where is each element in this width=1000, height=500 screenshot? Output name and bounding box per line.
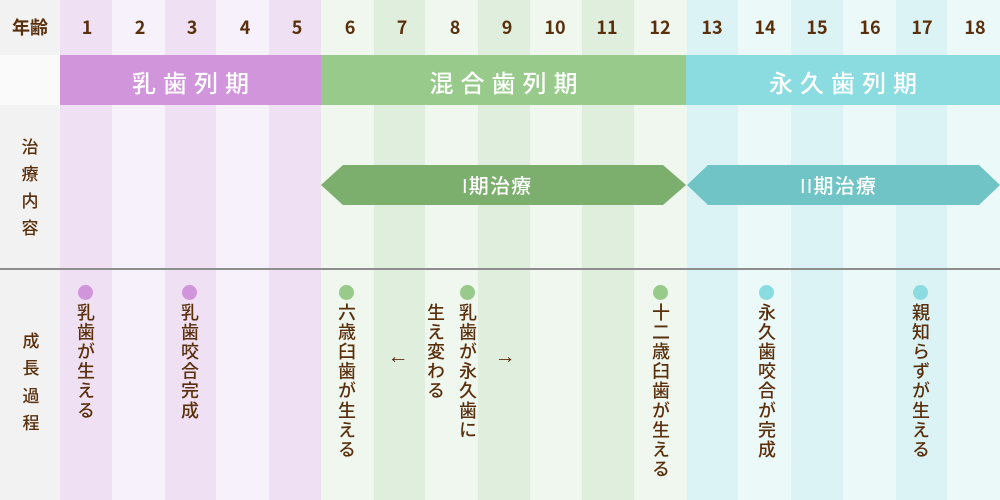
marker dot: age 1	[78, 285, 93, 300]
milestone: primary to permanent: 乳歯が永久歯に	[455, 303, 481, 440]
marker dot: age 8	[460, 285, 475, 300]
marker dot: age 14	[759, 285, 774, 300]
row label: growth	[22, 327, 40, 434]
stripe age 11	[582, 0, 634, 500]
marker dot: age 6	[339, 285, 354, 300]
age 1: 1	[82, 14, 92, 40]
label char: 長	[22, 354, 40, 379]
period band: permanent teeth	[686, 55, 1000, 105]
period band: permanent teeth: 永久歯列期	[769, 64, 924, 99]
label char: 治	[22, 133, 38, 158]
milestone: primary teeth erupt: 乳歯が生える	[73, 303, 99, 421]
stripe age 7	[374, 0, 425, 500]
marker dot: age 3	[182, 285, 197, 300]
heading: age: 年齢	[12, 14, 48, 40]
age 4: 4	[240, 14, 250, 40]
milestone: six-year molars erupt: 六歳臼歯が生える	[334, 303, 360, 460]
stripe age 1	[60, 0, 112, 500]
age 8: 8	[450, 14, 460, 40]
stripe age 3	[165, 0, 216, 500]
arrow: phase I	[321, 165, 686, 205]
age 9: 9	[502, 14, 512, 40]
period band: mixed dentition: 混合歯列期	[430, 64, 584, 99]
period band: primary teeth	[60, 55, 321, 105]
milestone: primary occlusion complete: 乳歯咬合完成	[177, 303, 203, 421]
label: phase I: I期治療	[462, 176, 532, 198]
marker dot: age 12	[653, 285, 668, 300]
milestone: permanent occlusion complete: 永久歯咬合が完成	[754, 303, 780, 460]
stripe age 15	[791, 0, 843, 500]
left arrow: ←	[388, 345, 408, 368]
stripe age 9	[478, 0, 530, 500]
label char: 過	[22, 382, 40, 407]
age 11: 11	[596, 14, 618, 40]
column stripes: mixed dentition	[321, 0, 687, 500]
age 6: 6	[345, 14, 355, 40]
period band: mixed dentition	[321, 55, 686, 105]
age 7: 7	[397, 14, 407, 40]
age 12: 12	[649, 14, 671, 40]
age 3: 3	[187, 14, 197, 40]
left label column	[0, 0, 60, 500]
age row	[12, 14, 986, 40]
blank cell in period row	[0, 55, 60, 105]
age 18: 18	[964, 14, 986, 40]
column stripes: primary teeth	[60, 0, 321, 500]
stripe age 17	[896, 0, 947, 500]
arrow: phase II	[687, 165, 1000, 205]
milestone: wisdom teeth erupt: 親知らずが生える	[908, 303, 934, 460]
label char: 療	[22, 160, 38, 185]
age 17: 17	[911, 14, 933, 40]
milestone: replaced: 生え変わる	[423, 303, 449, 401]
age 16: 16	[859, 14, 881, 40]
label char: 内	[22, 187, 38, 212]
right arrow: →	[494, 345, 516, 368]
stripe age 5	[269, 0, 321, 500]
marker dot: age 17	[913, 285, 928, 300]
label char: 程	[22, 409, 40, 434]
label char: 成	[22, 327, 40, 352]
stripe age 13	[687, 0, 738, 500]
age 13: 13	[701, 14, 723, 40]
label char: 容	[22, 214, 38, 239]
period band: primary teeth: 乳歯列期	[132, 64, 256, 99]
divider	[0, 268, 1000, 270]
age 5: 5	[292, 14, 302, 40]
label: phase II: II期治療	[800, 176, 877, 198]
column stripes: permanent teeth	[687, 0, 1000, 500]
age 15: 15	[806, 14, 828, 40]
milestone: twelve-year molars erupt: 十二歳臼歯が生える	[648, 303, 674, 479]
age 10: 10	[544, 14, 566, 40]
row label: treatment	[22, 133, 38, 239]
age 14: 14	[754, 14, 776, 40]
age 2: 2	[135, 14, 145, 40]
